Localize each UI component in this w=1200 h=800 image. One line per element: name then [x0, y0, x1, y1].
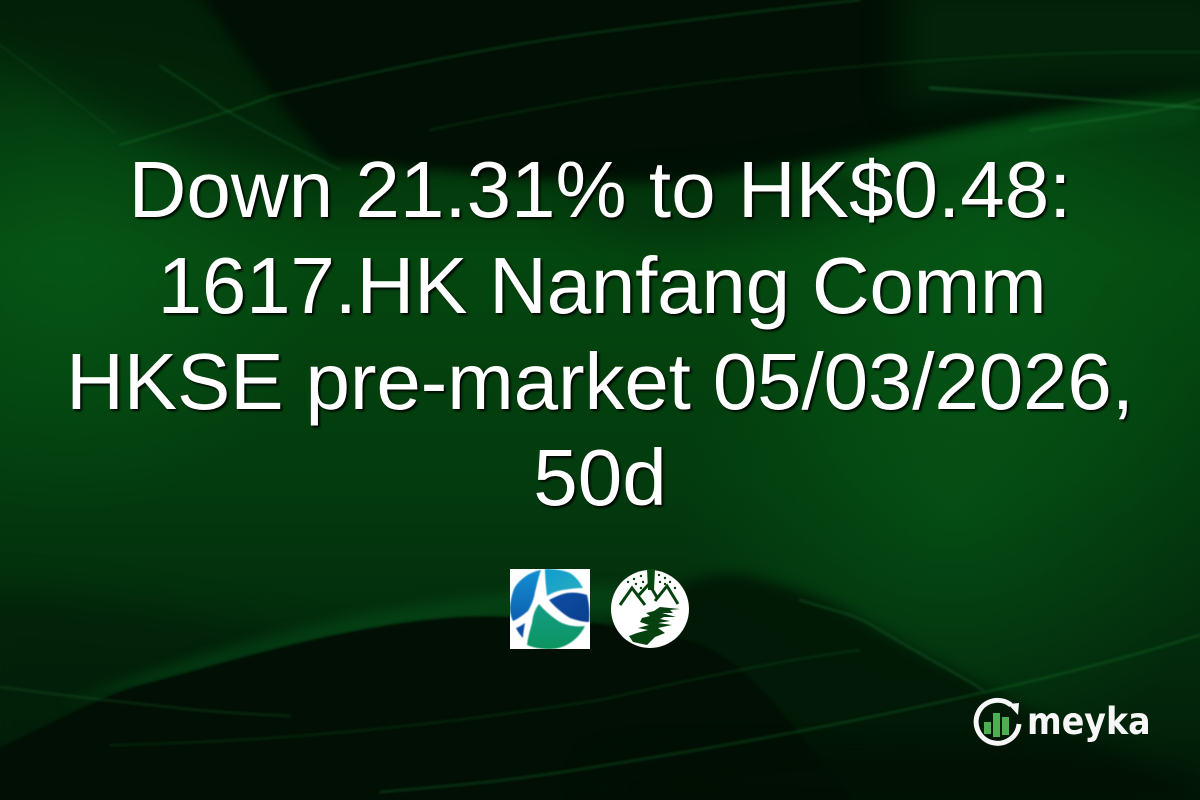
icon: meyka ring with bars	[974, 698, 1022, 746]
title: Down 21.31% to HK$0.48:	[129, 145, 1071, 234]
title: 1617.HK Nanfang Comm	[158, 241, 1046, 330]
title	[66, 145, 1134, 522]
lower left bright band	[60, 585, 640, 705]
dark hill	[0, 617, 860, 800]
upper dark shape	[190, 0, 1200, 184]
right brighter band	[820, 104, 1200, 178]
bottom dark strip	[600, 744, 1200, 800]
title: 50d	[533, 433, 667, 522]
brand name: meyka	[1027, 700, 1151, 743]
lower left dimming	[0, 590, 320, 780]
title: HKSE pre-market 05/03/2026,	[66, 337, 1134, 426]
mid dark band	[560, 130, 1000, 240]
company logos	[510, 569, 689, 649]
icon: mountain and river logo	[611, 569, 689, 648]
lower right dim hill	[600, 574, 1200, 800]
icon: Nanfang Communication logo	[510, 569, 590, 649]
top-right lift	[900, 0, 1200, 110]
upper-left dim wedge	[0, 0, 340, 170]
meyka brand logo	[974, 698, 1151, 746]
